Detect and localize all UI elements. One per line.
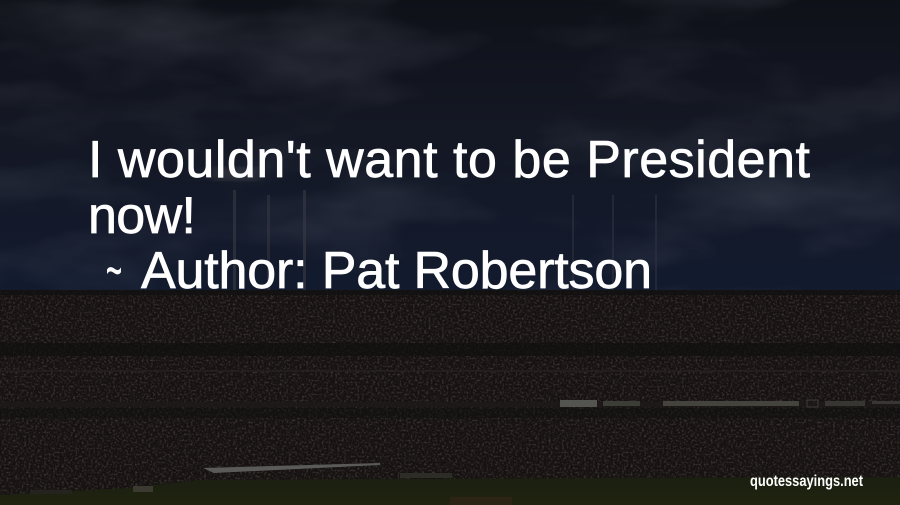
baseball field (0, 473, 900, 505)
author attribution: Author: Pat Robertson (141, 242, 652, 300)
watermark: quotessayings.net (750, 473, 863, 490)
stadium light tower (212, 168, 657, 290)
author attribution: ~ (106, 242, 122, 300)
outfield canopy (203, 463, 380, 473)
scoreboard band (560, 400, 900, 407)
quote text: I wouldn't want to be President (88, 131, 811, 189)
background: night sky (0, 0, 900, 292)
quote text: now! (88, 187, 196, 245)
quote text (88, 131, 811, 245)
stadium stands with crowd (0, 290, 900, 505)
